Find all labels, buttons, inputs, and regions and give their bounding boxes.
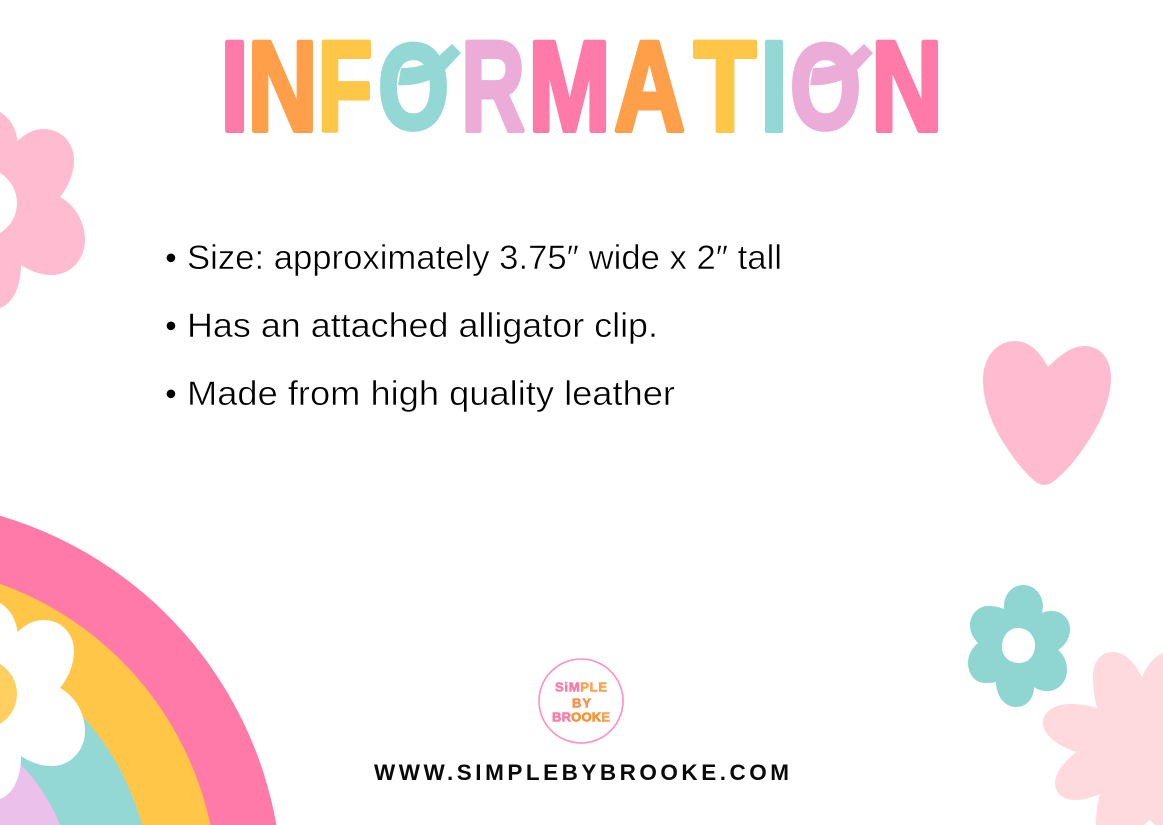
information list bbox=[165, 239, 782, 413]
pink flower, left edge bbox=[0, 112, 85, 308]
title: O bbox=[378, 19, 449, 154]
title: F bbox=[318, 16, 372, 158]
information list: • bbox=[165, 375, 177, 413]
information list: • bbox=[165, 307, 177, 345]
website url: WWW.SIMPLEBYBROOKE.COM bbox=[374, 760, 789, 785]
title: I bbox=[220, 15, 249, 158]
pink heart bbox=[983, 341, 1111, 485]
title bbox=[220, 14, 943, 159]
information list: Has an attached alligator clip. bbox=[187, 307, 658, 345]
information list: • bbox=[165, 239, 177, 277]
title: I bbox=[760, 16, 788, 159]
title: N bbox=[247, 16, 318, 159]
logo badge: BROOKE bbox=[552, 710, 610, 724]
teal flower bbox=[968, 585, 1070, 707]
rainbow with white flower bbox=[0, 516, 276, 825]
logo badge: SiMPLE bbox=[555, 680, 607, 694]
information list: Made from high quality leather bbox=[187, 375, 675, 413]
title: T bbox=[694, 14, 756, 158]
title: N bbox=[871, 15, 943, 158]
title: A bbox=[614, 16, 685, 159]
logo badge bbox=[539, 659, 623, 743]
information list: Size: approximately 3.75″ wide x 2″ tall bbox=[187, 239, 782, 277]
logo badge: BY bbox=[572, 696, 591, 710]
pale pink flower, bottom right bbox=[1043, 652, 1163, 825]
title: M bbox=[528, 15, 611, 158]
title: O bbox=[790, 19, 861, 154]
title: R bbox=[461, 16, 525, 158]
